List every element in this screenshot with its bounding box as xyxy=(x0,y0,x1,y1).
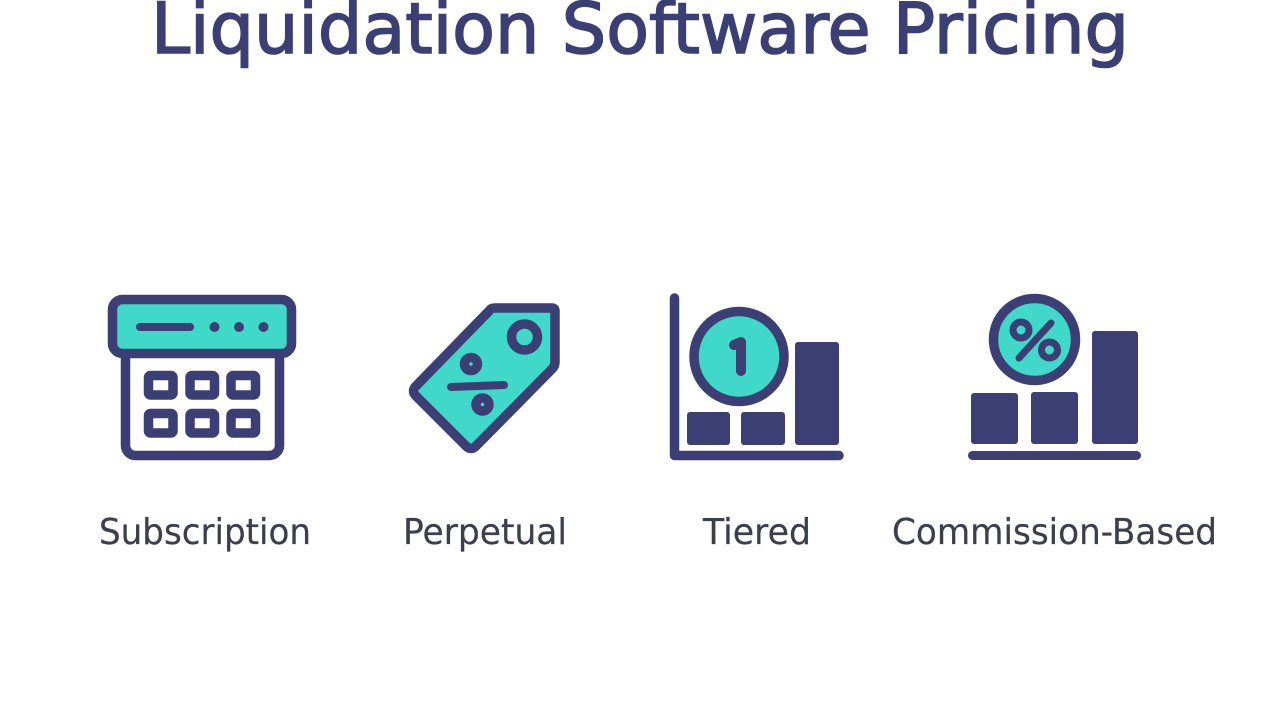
label: Tiered: Tiered xyxy=(702,512,811,553)
label: Subscription: Subscription xyxy=(99,512,311,553)
icon: tiered bar chart xyxy=(674,298,839,456)
icon: subscription calendar xyxy=(112,300,292,456)
label: Commission-Based: Commission-Based xyxy=(892,512,1217,553)
icon: commission bar chart xyxy=(968,298,1141,460)
icon: perpetual price tag xyxy=(414,308,555,448)
label: Perpetual: Perpetual xyxy=(403,512,567,553)
